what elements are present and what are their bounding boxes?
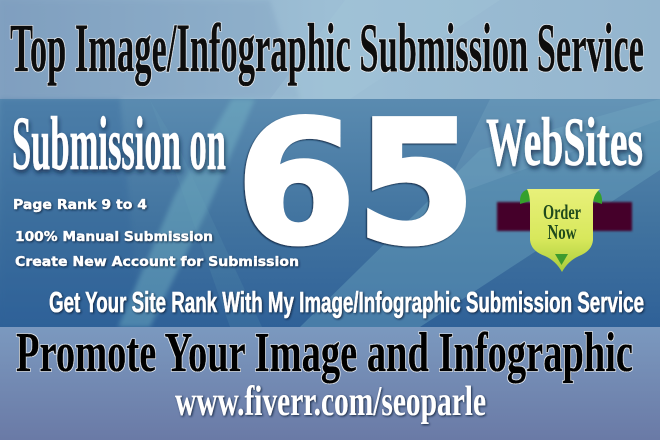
icon: order now ribbon badge <box>497 189 632 272</box>
text: feature list: Page Rank 9 to 4 <box>13 197 147 213</box>
badge text: Order <box>543 200 581 224</box>
text: url: www.fiverr.com/seoparle <box>175 379 486 425</box>
text: feature list: 100% Manual Submission <box>15 229 213 245</box>
panel: top band background <box>0 0 660 99</box>
badge arrow <box>555 254 568 265</box>
ribbon curls <box>520 189 602 204</box>
ribbon band <box>497 202 632 231</box>
panel: middle band background <box>0 99 660 327</box>
text: Submission on <box>12 102 226 186</box>
badge text <box>543 200 581 244</box>
text: feature list: Create New Account for Submission <box>15 254 299 270</box>
panel: bottom band background <box>0 327 660 440</box>
big number 65: 65 <box>236 85 476 283</box>
badge shield <box>527 189 600 272</box>
text: feature list <box>13 197 299 270</box>
badge text: Now <box>548 220 577 244</box>
